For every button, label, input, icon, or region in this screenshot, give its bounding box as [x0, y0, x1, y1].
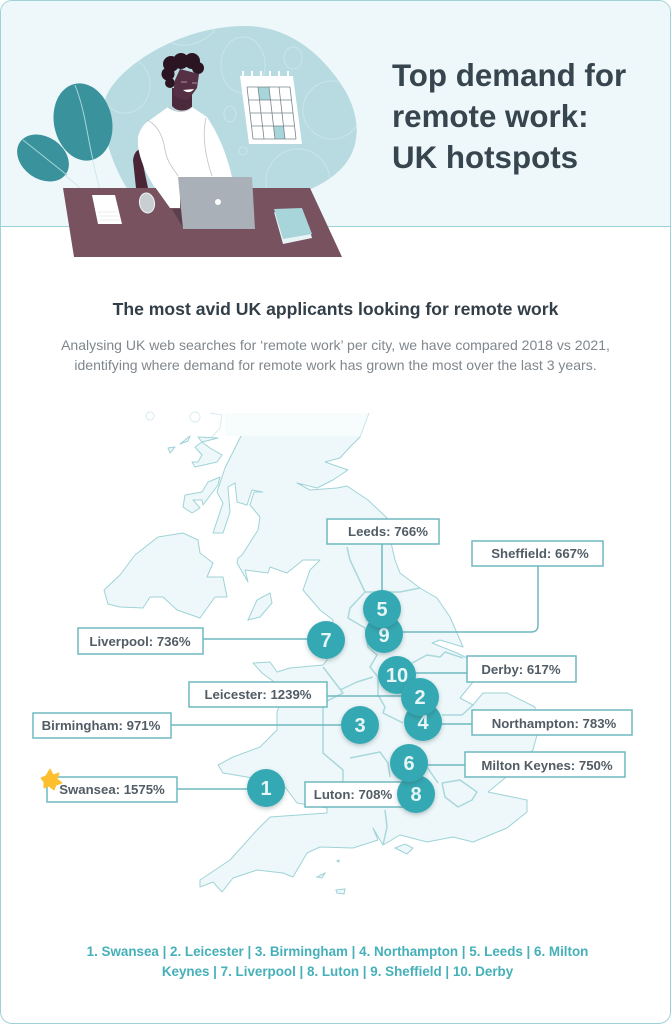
label: Sheffield: [472, 541, 603, 566]
pin 7: 7: [320, 630, 332, 652]
map: Isle of Man: [248, 593, 272, 620]
label: Sheffield: Sheffield: 667%: [491, 546, 589, 561]
illustration: person working at desk: [17, 26, 357, 257]
label: Milton Keynes: [465, 752, 625, 777]
label: Luton: Luton: 708%: [314, 787, 392, 802]
ranking list: [87, 944, 588, 979]
pin 4: [404, 703, 442, 741]
pin 2: [401, 678, 439, 716]
label: Liverpool: Liverpool: 736%: [89, 634, 191, 649]
label: Birmingham: [33, 713, 171, 738]
person: [138, 53, 232, 208]
title: [392, 58, 626, 175]
UK map with labels and pins: [32, 412, 633, 894]
pin 3: 3: [354, 715, 366, 737]
pin 2: 2: [414, 687, 426, 709]
icon: mouse: [138, 192, 156, 214]
map: regional borders: [323, 547, 477, 845]
label: Derby: Derby: 617%: [481, 662, 561, 677]
map: Northern Ireland: [104, 533, 227, 618]
label: Swansea: Swansea: 1575%: [59, 782, 165, 797]
connectors: [171, 544, 538, 789]
background blob: [104, 26, 357, 190]
title: Top demand for: [392, 58, 626, 93]
icon: laptop: [178, 177, 255, 229]
ranking list: Keynes | 7. Liverpool | 8. Luton | 9. Sheffield | 10. Derby: [162, 964, 513, 978]
label: Luton: [305, 782, 405, 807]
pin 9: [365, 615, 403, 653]
map: far north islands: [146, 412, 222, 437]
plant stems: [65, 85, 100, 190]
label: Northampton: Northampton: 783%: [492, 716, 617, 731]
label: Leeds: Leeds: 766%: [348, 524, 428, 539]
description text: Analysing UK web searches for ‘remote work’ per city, we have compared 2018 vs 2021,: [61, 337, 610, 353]
icon: small leaf: [8, 125, 78, 191]
pin 7: [307, 621, 345, 659]
description text: [61, 337, 610, 373]
title: UK hotspots: [392, 140, 578, 175]
label: Swansea: [47, 777, 177, 802]
hand under laptop: [172, 209, 184, 230]
blob decorative circles: [108, 30, 356, 188]
icon: large leaf: [47, 78, 119, 166]
icon: book: [274, 208, 312, 244]
pin 5: [363, 590, 401, 628]
title: remote work:: [392, 99, 589, 134]
pin 5: 5: [376, 599, 388, 621]
map: top fade: [225, 405, 375, 437]
subheading: The most avid UK applicants looking for remote work: [113, 299, 558, 319]
label: Leicester: [189, 682, 327, 707]
map: Hebrides islands: [168, 436, 222, 513]
ranking list: 1. Swansea | 2. Leicester | 3. Birmingham | 4. Northampton | 5. Leeds | 6. Milton: [87, 944, 588, 959]
map: Great Britain: [200, 413, 537, 892]
pin 10: [378, 656, 416, 694]
pin 8: 8: [410, 784, 422, 806]
pin 6: [390, 744, 428, 782]
pin 4: 4: [417, 712, 429, 734]
chair: [133, 150, 148, 188]
icon: gold star: [41, 769, 62, 790]
sweater sleeve on desk: [155, 187, 180, 208]
label: Derby: [467, 656, 576, 682]
pin 1: 1: [260, 778, 272, 800]
pin 3: [341, 706, 379, 744]
label: Milton Keynes: Milton Keynes: 750%: [481, 758, 613, 773]
label: Birmingham: Birmingham: 971%: [42, 718, 161, 733]
pin 1: [247, 769, 285, 807]
icon: paper sheet: [92, 195, 122, 224]
label: Leicester: Leicester: 1239%: [204, 687, 312, 702]
pin 6: 6: [403, 753, 415, 775]
label: Liverpool: [78, 628, 203, 654]
map: Isle of Wight: [395, 844, 413, 854]
desk: [63, 188, 342, 257]
icon: calendar: [240, 71, 302, 144]
pin 8: [397, 775, 435, 813]
label: Leeds: [327, 519, 439, 544]
label: Northampton: [472, 710, 632, 735]
description text: identifying where demand for remote work has grown the most over the last 3 years.: [74, 357, 597, 373]
header band: [1, 1, 670, 227]
map: southern small islands: [317, 860, 345, 894]
pin 9: 9: [378, 625, 390, 647]
pin 10: 10: [386, 665, 408, 687]
